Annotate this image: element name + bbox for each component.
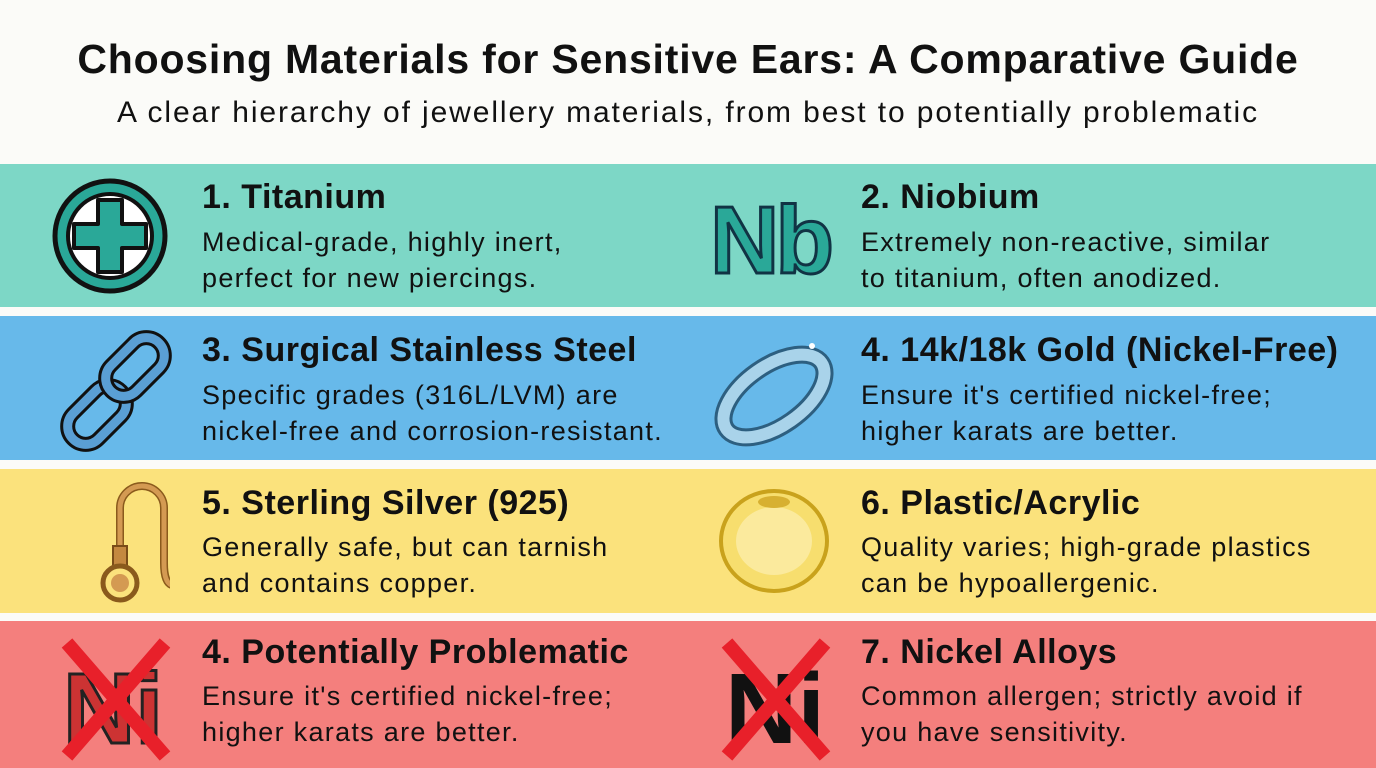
text: Common allergen; strictly avoid if — [861, 681, 1303, 711]
icon: medical cross — [52, 178, 168, 294]
item 2 — [861, 178, 1270, 293]
text: 3. Surgical Stainless Steel — [202, 331, 637, 369]
text: to titanium, often anodized. — [861, 263, 1222, 293]
text: 2. Niobium — [861, 178, 1040, 216]
item 7 — [861, 633, 1303, 747]
icon: ear hook — [100, 482, 170, 602]
text: 4. Potentially Problematic — [202, 633, 629, 671]
text: and contains copper. — [202, 568, 477, 598]
text: Ensure it's certified nickel-free; — [202, 681, 613, 711]
item 5 — [202, 484, 609, 598]
subtitle: A clear hierarchy of jewellery materials, from best to potentially problematic — [117, 96, 1259, 129]
text: 5. Sterling Silver (925) — [202, 484, 569, 522]
text: higher karats are better. — [861, 416, 1179, 446]
text: 7. Nickel Alloys — [861, 633, 1117, 671]
text: 4. 14k/18k Gold (Nickel-Free) — [861, 331, 1338, 369]
text: Quality varies; high-grade plastics — [861, 532, 1312, 562]
icon: ring — [714, 343, 834, 446]
text: Ensure it's certified nickel-free; — [861, 380, 1272, 410]
band: teal — [0, 164, 1376, 307]
text: 1. Titanium — [202, 178, 386, 216]
text: can be hypoallergenic. — [861, 568, 1160, 598]
text: Medical-grade, highly inert, — [202, 227, 563, 257]
icon: crossed Ni: Ni — [725, 653, 825, 763]
text: you have sensitivity. — [861, 717, 1128, 747]
text: perfect for new piercings. — [202, 263, 537, 293]
icon: chain — [60, 330, 172, 452]
text: higher karats are better. — [202, 717, 520, 747]
icon: crossed Ni outline: Ni — [63, 653, 163, 763]
item 3 — [202, 331, 663, 446]
item 6 — [861, 484, 1312, 598]
item 1 — [202, 178, 563, 293]
text: 6. Plastic/Acrylic — [861, 484, 1140, 522]
text: Generally safe, but can tarnish — [202, 532, 609, 562]
item 4 problematic — [202, 633, 629, 747]
band: red — [0, 621, 1376, 768]
title: Choosing Materials for Sensitive Ears: A Comparative Guide — [77, 36, 1299, 82]
icon: bead — [719, 489, 829, 593]
text: nickel-free and corrosion-resistant. — [202, 416, 663, 446]
text: Specific grades (316L/LVM) are — [202, 380, 619, 410]
band: blue — [0, 316, 1376, 460]
band: yellow — [0, 469, 1376, 613]
item 4 gold — [861, 331, 1338, 446]
text: Extremely non-reactive, similar — [861, 227, 1270, 257]
